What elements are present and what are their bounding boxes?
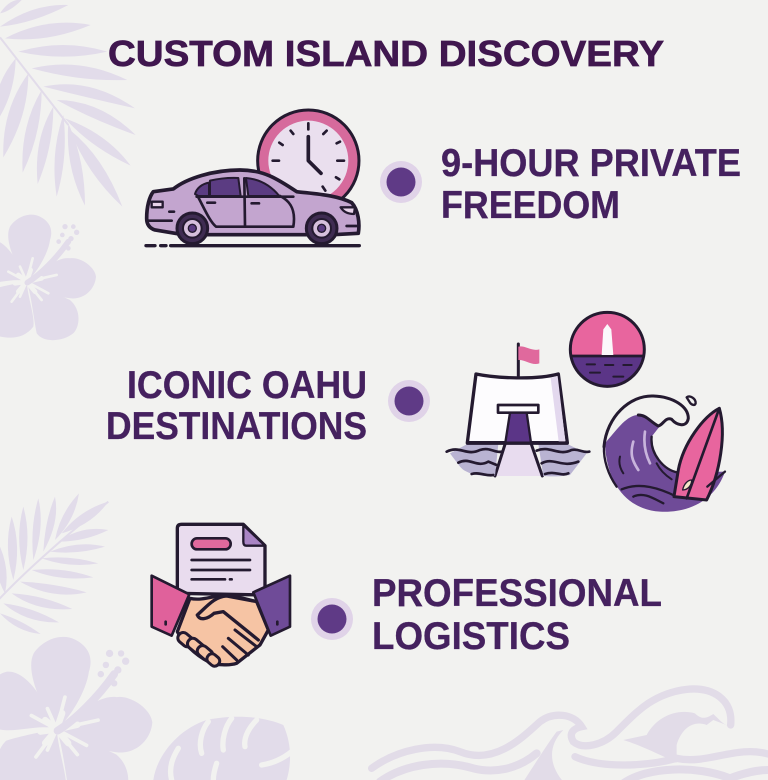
bullet 3 xyxy=(311,598,353,640)
icon: car and clock xyxy=(146,110,359,246)
text: 9-hour private freedom: FREEDOM xyxy=(441,184,620,227)
icon: clock xyxy=(258,110,359,211)
decorative palm frond lower left xyxy=(0,493,108,634)
decorative hibiscus left xyxy=(0,215,96,340)
icon: lighthouse badge xyxy=(570,312,644,386)
icon: handshake xyxy=(152,576,290,668)
icon: fort with flag xyxy=(447,344,589,476)
text: 9-hour private freedom: 9-HOUR PRIVATE xyxy=(441,142,741,185)
text: iconic oahu destinations xyxy=(106,364,367,448)
icon: handshake and document xyxy=(152,524,290,668)
decorative monstera leaf xyxy=(153,717,292,780)
icon: destinations group xyxy=(447,312,725,512)
bullet 2 xyxy=(388,380,430,422)
road line xyxy=(146,241,359,251)
text: iconic oahu destinations: ICONIC OAHU xyxy=(127,364,367,407)
text: iconic oahu destinations: DESTINATIONS xyxy=(106,405,367,448)
icon: car xyxy=(147,170,359,244)
decorative palm frond top left xyxy=(0,0,136,207)
icon: document xyxy=(177,524,265,595)
text: 9-hour private freedom xyxy=(441,142,741,227)
decorative waves bottom right xyxy=(372,689,768,780)
text: professional logistics xyxy=(372,572,662,658)
text: professional logistics: PROFESSIONAL xyxy=(372,572,662,615)
title: CUSTOM ISLAND DISCOVERY xyxy=(108,33,664,74)
icon: wave and surfboard xyxy=(604,396,725,512)
text: professional logistics: LOGISTICS xyxy=(372,615,570,658)
bullet 1 xyxy=(380,161,422,203)
decorative hibiscus bottom left xyxy=(0,637,152,780)
